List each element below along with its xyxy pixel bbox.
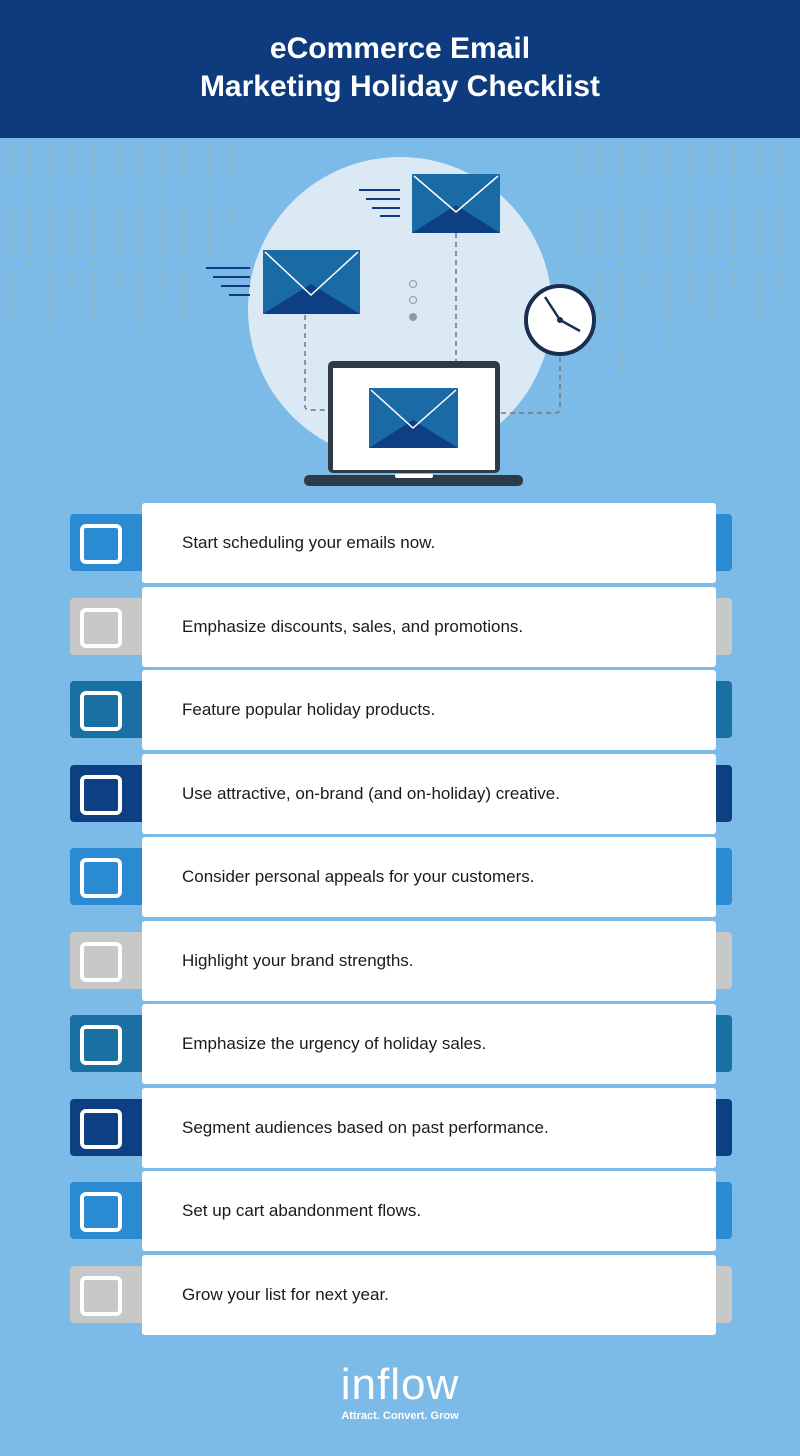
checklist item 6: Highlight your brand strengths. xyxy=(182,951,414,970)
checklist item 8 xyxy=(70,1088,732,1168)
checklist item 9: Set up cart abandonment flows. xyxy=(182,1201,421,1220)
checklist item 1 xyxy=(70,503,732,583)
title: eCommerce Email xyxy=(270,32,530,65)
hero illustration xyxy=(9,145,781,486)
title: Marketing Holiday Checklist xyxy=(200,70,600,103)
dashed connectors xyxy=(305,233,560,413)
checklist item 7: Emphasize the urgency of holiday sales. xyxy=(182,1034,486,1053)
dots xyxy=(409,280,417,321)
icon: clock xyxy=(526,286,594,354)
speed lines xyxy=(206,190,400,295)
header banner xyxy=(0,0,800,138)
checklist item 1: Start scheduling your emails now. xyxy=(182,533,435,552)
icon: envelope top xyxy=(412,174,500,233)
checklist item 2 xyxy=(70,587,732,667)
checklist item 4 xyxy=(70,754,732,834)
checklist item 6 xyxy=(70,921,732,1001)
checklist item 9 xyxy=(70,1171,732,1251)
footer logo: inflow xyxy=(341,1360,459,1409)
checklist item 10 xyxy=(70,1255,732,1335)
checklist item 7 xyxy=(70,1004,732,1084)
checklist item 3 xyxy=(70,670,732,750)
icon: envelope left xyxy=(263,250,360,314)
circle backdrop xyxy=(248,157,552,461)
checklist item 2: Emphasize discounts, sales, and promotions. xyxy=(182,617,523,636)
checklist item 10: Grow your list for next year. xyxy=(182,1285,389,1304)
title xyxy=(200,32,600,103)
footer logo: Attract. Convert. Grow xyxy=(341,1410,459,1422)
checklist item 8: Segment audiences based on past performance. xyxy=(182,1118,549,1137)
checklist item 3: Feature popular holiday products. xyxy=(182,700,435,719)
checklist item 5: Consider personal appeals for your customers. xyxy=(182,867,534,886)
checklist item 5 xyxy=(70,837,732,917)
icon: laptop xyxy=(304,361,523,486)
checklist item 4: Use attractive, on-brand (and on-holiday) creative. xyxy=(182,784,560,803)
